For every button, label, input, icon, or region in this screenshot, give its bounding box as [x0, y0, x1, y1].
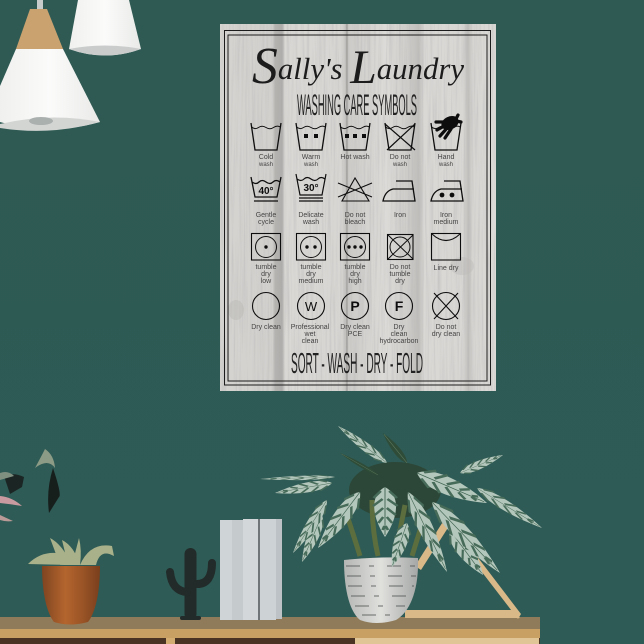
symbol: warm wash: wash: [303, 162, 318, 168]
lamp: rear shade: [69, 0, 141, 56]
white ribbed pot: [344, 557, 418, 623]
title: ally's: [278, 51, 350, 86]
stack of white books: [220, 519, 282, 620]
symbol: do not bleach: [338, 178, 372, 226]
symbol: gentle cycle 40: 40°: [258, 186, 274, 197]
symbol: dry clean: [251, 292, 281, 331]
symbol: do not dry clean: [432, 292, 460, 338]
symbol: warm wash: [296, 123, 326, 168]
symbol: cold wash: [251, 123, 281, 168]
symbol: delicate wash 30: Delicate: [298, 212, 324, 219]
symbol: tumble dry medium: tumble: [300, 264, 322, 271]
poster: [220, 24, 496, 391]
stems and dark foliage: [345, 462, 441, 556]
symbol: delicate wash 30: [296, 174, 326, 226]
symbol: delicate wash 30: wash: [302, 219, 319, 226]
symbol: dry clean hydrocarbon: clean: [391, 331, 407, 338]
symbol: do not tumble dry: Do not: [390, 264, 410, 271]
symbol: iron medium: medium: [434, 219, 459, 226]
symbol: tumble dry medium: dry: [306, 271, 316, 278]
symbol: dry clean hydrocarbon: hydrocarbon: [380, 338, 419, 345]
symbol: tumble dry high: high: [348, 278, 362, 285]
symbol: warm wash: Warm: [302, 154, 320, 161]
symbol: hot wash: [340, 123, 370, 161]
symbol: gentle cycle 40: cycle: [258, 219, 274, 226]
title: S: [252, 38, 278, 95]
symbol: hand wash: [431, 113, 461, 168]
row 4: dry clean symbols: [251, 292, 460, 345]
leaves: [260, 422, 545, 580]
cactus ornament: [170, 554, 212, 618]
symbol: professional wet clean: Professional: [291, 324, 330, 331]
symbol: tumble dry medium: medium: [299, 278, 324, 285]
symbol: professional wet clean: clean: [302, 338, 318, 345]
row 1: wash symbols: [251, 113, 461, 168]
symbol: do not wash: wash: [392, 162, 407, 168]
symbol: dry clean hydrocarbon: Dry: [394, 324, 405, 331]
symbol: hot wash: Hot wash: [340, 154, 370, 161]
symbol: dry clean hydrocarbon: [380, 292, 419, 345]
symbol: line dry: Line dry: [434, 265, 459, 272]
poster double border: [224, 30, 490, 385]
symbol: iron medium: [431, 181, 463, 226]
symbol: dry clean PCE: Dry clean: [340, 324, 370, 331]
symbol: do not wash: [385, 123, 415, 168]
symbol: hand wash: wash: [438, 162, 453, 168]
potted silver aglaonema: [260, 422, 545, 623]
symbol: dry clean PCE: P: [350, 298, 360, 314]
pendant lamps: [0, 0, 141, 131]
shelf: [0, 617, 540, 644]
symbol: do not wash: Do not: [390, 154, 410, 161]
background plant leaves at left edge: [0, 449, 60, 521]
symbol: professional wet clean: [291, 292, 330, 345]
plant in terracotta pot: [28, 538, 114, 624]
symbol: delicate wash 30: 30°: [303, 183, 319, 194]
symbol: cold wash: wash: [258, 162, 273, 168]
symbol: tumble dry high: tumble: [344, 264, 366, 271]
symbol: do not bleach: bleach: [345, 219, 365, 226]
lamp: front shade with wood cap: [0, 0, 100, 131]
row 2: gentle cycles, bleach, iron: [251, 174, 463, 226]
symbol: tumble dry high: [340, 234, 370, 285]
terracotta pot: [42, 566, 100, 624]
symbol: tumble dry low: tumble: [255, 264, 277, 271]
succulent leaves: [28, 538, 114, 565]
symbol: professional wet clean: W: [305, 299, 318, 314]
symbol: tumble dry low: low: [261, 278, 272, 285]
symbol: do not tumble dry: [388, 234, 413, 285]
symbol: hand wash: Hand: [438, 154, 454, 161]
symbol: iron: [383, 181, 415, 219]
symbol: dry clean hydrocarbon: F: [395, 298, 404, 314]
symbol: tumble dry high: dry: [350, 271, 360, 278]
symbol: do not tumble dry: tumble: [389, 271, 411, 278]
symbol: tumble dry low: dry: [261, 271, 271, 278]
poster wood background: [220, 24, 496, 391]
symbol: do not dry clean: dry clean: [432, 331, 460, 338]
symbol: iron medium: Iron: [440, 212, 452, 219]
row 3: tumble dry symbols: [252, 234, 460, 285]
symbol: dry clean PCE: [340, 292, 370, 338]
symbol: do not tumble dry: dry: [395, 278, 405, 285]
title: L: [349, 41, 377, 94]
symbol: tumble dry medium: [296, 234, 326, 285]
symbol: line dry: [432, 234, 460, 272]
symbol: tumble dry low: [252, 234, 280, 285]
title: aundry: [377, 51, 464, 86]
symbol: dry clean: Dry clean: [251, 324, 281, 331]
symbol: iron: Iron: [394, 212, 406, 219]
symbol: do not bleach: Do not: [345, 212, 365, 219]
symbol: cold wash: Cold: [259, 154, 273, 161]
symbol: professional wet clean: wet: [304, 331, 315, 338]
wooden triangle stand: [405, 520, 521, 619]
symbol: gentle cycle 40: Gentle: [256, 212, 276, 219]
symbol: do not dry clean: Do not: [436, 324, 456, 331]
symbol: gentle cycle 40: [251, 177, 281, 226]
symbol: dry clean PCE: PCE: [348, 331, 363, 338]
